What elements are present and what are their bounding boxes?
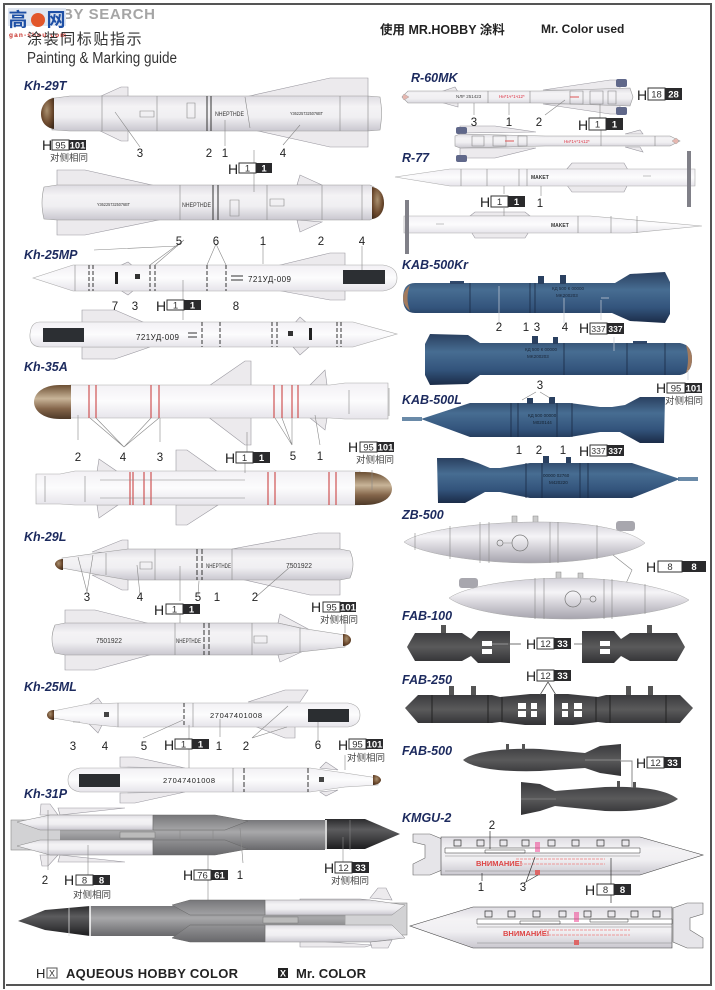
- panel: KAB-500Kr: KAB-500Kr: [402, 258, 469, 272]
- callouts: [516, 380, 624, 459]
- callouts: 2: [42, 875, 48, 887]
- callouts: [646, 559, 706, 575]
- callouts: 1: [214, 592, 220, 604]
- callouts: [84, 592, 358, 626]
- bomb top view: КД 500 К 00000: [552, 286, 585, 291]
- panel: FAB-250: FAB-250: [402, 673, 452, 687]
- callouts: 5: [195, 592, 201, 604]
- missile top view: [11, 804, 400, 920]
- callouts: 1: [612, 120, 618, 130]
- callouts: 4: [280, 148, 287, 160]
- callouts: 337: [591, 324, 606, 334]
- callouts: 1: [242, 453, 247, 464]
- missile top view: [55, 533, 353, 601]
- callouts: H: [228, 161, 238, 177]
- bomb left view: [407, 625, 520, 663]
- callouts: H: [348, 439, 358, 455]
- callouts: 8: [603, 885, 608, 896]
- callouts: 2: [489, 820, 495, 832]
- bomb bottom view: КД 500 К 00000: [525, 347, 558, 352]
- bomb top view: M020144: [533, 420, 552, 425]
- bomb top view: КД 500 00000: [528, 413, 557, 418]
- callouts: 1: [189, 604, 195, 616]
- callouts: 95: [55, 140, 66, 152]
- panel: Kh-25MP: [24, 236, 397, 359]
- callouts: 1: [222, 148, 228, 160]
- colour code: 12: [650, 758, 661, 769]
- pod bottom view: [410, 903, 703, 948]
- callouts: 对侧相同: [73, 889, 111, 901]
- bomb top view: [402, 392, 665, 443]
- watermark: site logo: 网: [46, 10, 66, 31]
- callouts: H: [585, 882, 595, 898]
- pod top view: [413, 831, 703, 903]
- callouts: 3: [471, 117, 477, 129]
- callouts: 95: [363, 442, 374, 454]
- watermark: hobby search: HOBBY SEARCH: [27, 6, 155, 23]
- callouts: 3: [137, 148, 143, 160]
- callouts: H: [646, 559, 656, 575]
- callouts: 1: [478, 882, 484, 894]
- title chinese: 涂装同标贴指示: [27, 31, 143, 48]
- callouts: 337: [608, 446, 623, 456]
- tank top view: [404, 516, 645, 597]
- missile bottom view: Y362257325076BT: [97, 202, 130, 207]
- callouts: 对侧相同: [665, 395, 703, 407]
- bomb bottom view: MK200203: [527, 354, 549, 359]
- colour code: [636, 755, 681, 771]
- callouts: 95: [671, 384, 681, 394]
- panel: Kh-31P: [11, 787, 407, 948]
- callouts: 对侧相同: [320, 614, 358, 626]
- callouts: 4: [137, 592, 144, 604]
- callouts: 1: [172, 604, 177, 616]
- callouts: 7: [112, 301, 118, 313]
- callouts: 3: [84, 592, 90, 604]
- bomb bottom view: [425, 334, 692, 385]
- missile bottom view: NHEPTHDE: [182, 202, 212, 209]
- callouts: 4: [562, 322, 569, 334]
- missile top view: Y362257325076BT: [290, 111, 323, 116]
- callouts: 1: [181, 740, 186, 750]
- missile bottom view: MAKET: [551, 223, 569, 229]
- missile top view: 721УД-009: [248, 275, 292, 284]
- missile top view: Ни*1ч*1ч12*: [499, 94, 525, 99]
- callouts: 2: [206, 148, 212, 160]
- callouts: 1: [260, 236, 266, 248]
- bomb bottom view: [521, 781, 678, 815]
- callouts: 1: [237, 870, 243, 882]
- missile bottom view: [404, 200, 702, 254]
- callouts: 337: [591, 446, 606, 456]
- panel: R-77: R-77: [402, 151, 430, 165]
- panel: Kh-25ML: [24, 680, 385, 803]
- pod bottom view: ВНИМАНИЕ!: [503, 929, 549, 938]
- callouts: [471, 87, 682, 133]
- missile bottom view: Ни*1ч*1ч12*: [564, 139, 590, 144]
- callouts: 1: [506, 117, 512, 129]
- callouts: 对侧相同: [331, 875, 369, 887]
- callouts: 2: [536, 117, 542, 129]
- panel: Kh-29L: Kh-29L: [24, 530, 66, 544]
- callouts: 101: [378, 442, 394, 454]
- callouts: 对侧相同: [356, 454, 394, 466]
- panel: ZB-500: ZB-500: [401, 508, 444, 522]
- callouts: 3: [537, 380, 543, 392]
- bomb right view: [582, 625, 685, 663]
- panel: KMGU-2: KMGU-2: [402, 811, 451, 825]
- missile top view: 7501922: [286, 563, 312, 570]
- callouts: 2: [536, 445, 542, 457]
- callouts: 1: [514, 197, 520, 208]
- callouts: 76: [197, 870, 208, 882]
- missile bottom view: [36, 450, 392, 525]
- callouts: 2: [252, 592, 258, 604]
- callouts: H: [578, 117, 588, 133]
- callouts: 4: [102, 741, 109, 753]
- callouts: H: [42, 137, 52, 153]
- callouts: 1: [317, 451, 323, 463]
- callouts: 1: [173, 300, 178, 312]
- missile bottom view: [68, 725, 381, 803]
- callouts: [42, 860, 369, 901]
- missile top view: 27047401008: [210, 711, 262, 720]
- callouts: 3: [520, 882, 526, 894]
- callouts: 3: [534, 322, 540, 334]
- callouts: 5: [290, 451, 296, 463]
- callouts: 6: [213, 236, 219, 248]
- missile top view: [47, 690, 360, 740]
- panel: KAB-500L: KAB-500L: [402, 393, 462, 407]
- callouts: [496, 320, 703, 407]
- callouts: [42, 137, 287, 177]
- callouts: H: [480, 194, 490, 210]
- callouts: 1: [190, 300, 196, 312]
- callouts: H: [156, 298, 166, 314]
- missile bottom view: [455, 125, 680, 162]
- legend: aqueous hobby color: AQUEOUS HOBBY COLOR: [66, 966, 239, 981]
- callouts: 5: [176, 236, 182, 248]
- panel: KAB-500Kr: [402, 258, 703, 407]
- callouts: [480, 194, 543, 210]
- colour code: H: [526, 636, 536, 652]
- callouts: [70, 737, 385, 764]
- panel: Kh-25MP: Kh-25MP: [24, 248, 78, 262]
- callouts: 8: [82, 876, 87, 886]
- missile top view: MAKET: [531, 175, 549, 181]
- callouts: 1: [537, 198, 543, 210]
- legend: mr. color: Mr. COLOR: [296, 966, 367, 981]
- callouts: 8: [233, 301, 239, 313]
- colour code: 33: [557, 671, 568, 682]
- callouts: 1: [516, 445, 522, 457]
- legend: mr. color: X: [280, 968, 286, 978]
- panel: Kh-29T: Kh-29T: [24, 79, 68, 93]
- callouts: H: [183, 867, 193, 883]
- callouts: H: [579, 320, 589, 336]
- legend: aqueous hobby color: X: [49, 968, 55, 978]
- callouts: 3: [70, 741, 76, 753]
- callouts: 101: [686, 384, 702, 394]
- panel: Kh-31P: Kh-31P: [24, 787, 68, 801]
- callouts: 2: [75, 452, 81, 464]
- callouts: 对侧相同: [50, 152, 88, 164]
- missile bottom view: [18, 888, 407, 948]
- bomb top view: [463, 744, 632, 787]
- panel: FAB-500: FAB-500: [402, 744, 452, 758]
- missile bottom view: 27047401008: [163, 776, 215, 785]
- bomb top view: [403, 272, 670, 324]
- colour code: H: [526, 668, 536, 684]
- missile top view: [33, 240, 397, 300]
- callouts: 3: [157, 452, 163, 464]
- panel: Kh-29T: [24, 78, 384, 235]
- panel: R-60MK: [402, 71, 682, 162]
- watermark: site logo: 高: [8, 8, 28, 31]
- callouts: 101: [70, 140, 86, 152]
- missile top view: NHEPTHDE: [215, 111, 245, 118]
- paint brand note: 使用 MR.HOBBY 涂料: [380, 22, 505, 37]
- callouts: 337: [608, 324, 623, 334]
- callouts: H: [311, 599, 321, 615]
- callouts: 3: [132, 301, 138, 313]
- pod top view: ВНИМАНИЕ!: [476, 859, 522, 868]
- callouts: 1: [523, 322, 529, 334]
- colour note: Mr. Color used: [541, 22, 624, 36]
- panel: KMGU-2: [402, 811, 703, 948]
- panel: KAB-500L: [402, 380, 698, 503]
- callouts: 1: [497, 197, 502, 208]
- callouts: 12: [338, 863, 349, 874]
- panel: Kh-35A: Kh-35A: [24, 360, 68, 374]
- callouts: 1: [259, 453, 265, 464]
- callouts: 4: [359, 236, 366, 248]
- callouts: 18: [651, 90, 662, 100]
- callouts: H: [338, 737, 348, 753]
- callouts: [75, 439, 394, 466]
- callouts: H: [637, 87, 647, 103]
- missile bottom view: [52, 605, 351, 670]
- callouts: 8: [99, 876, 104, 886]
- bomb bottom view: M420220: [549, 480, 568, 485]
- callouts: H: [154, 602, 164, 618]
- missile top view: [395, 151, 695, 207]
- callouts: 1: [560, 445, 566, 457]
- callouts: [112, 236, 366, 314]
- watermark: site logo: [8, 8, 66, 39]
- panel: R-60MK: R-60MK: [411, 71, 459, 85]
- panel: FAB-100: [402, 609, 685, 663]
- callouts: 6: [315, 740, 321, 752]
- callouts: H: [579, 443, 589, 459]
- callouts: 101: [340, 602, 357, 614]
- colour code: 12: [540, 639, 551, 650]
- callouts: 33: [355, 863, 366, 874]
- missile bottom view: [42, 150, 384, 235]
- colour code: [508, 636, 600, 652]
- bomb right view: [554, 686, 693, 725]
- callouts: 对侧相同: [347, 752, 385, 764]
- missile bottom view: NHEPTHDE: [176, 639, 201, 645]
- bomb bottom view: 00000 02760: [543, 473, 570, 478]
- missile bottom view: 7501922: [96, 638, 122, 645]
- callouts: H: [164, 737, 174, 753]
- watermark: site logo: gan-shou.com: [9, 32, 66, 39]
- callouts: [478, 820, 631, 898]
- colour code: 12: [540, 671, 551, 682]
- panel: R-77: [395, 151, 702, 254]
- missile top view: NЛF 251423: [456, 94, 482, 99]
- callouts: 4: [120, 452, 127, 464]
- callouts: 1: [261, 164, 267, 174]
- callouts: 1: [245, 164, 250, 174]
- callouts: 95: [352, 740, 363, 750]
- panel: Kh-29L: [24, 530, 358, 670]
- missile top view: NHEPTHDE: [206, 564, 231, 570]
- colour code: 33: [667, 758, 678, 769]
- panel: Kh-35A: [24, 360, 394, 525]
- callouts: H: [324, 860, 334, 876]
- callouts: 61: [214, 870, 225, 882]
- missile bottom view: 721УД-009: [136, 333, 180, 342]
- callouts: 95: [326, 602, 337, 614]
- callouts: 1: [216, 741, 222, 753]
- missile top view: [402, 79, 633, 124]
- bomb top view: MK200203: [556, 293, 578, 298]
- missile top view: [41, 78, 382, 147]
- title english: Painting & Marking guide: [27, 50, 177, 67]
- callouts: 2: [318, 236, 324, 248]
- missile top view: [34, 361, 389, 452]
- tank bottom view: [449, 572, 689, 619]
- bomb bottom view: [437, 456, 698, 503]
- callouts: 8: [667, 562, 673, 573]
- colour code: H: [636, 755, 646, 771]
- callouts: 101: [367, 740, 383, 750]
- legend: aqueous hobby color: H: [36, 966, 45, 981]
- callouts: H: [225, 450, 235, 466]
- panel: FAB-500: [402, 744, 681, 815]
- panel: FAB-100: FAB-100: [402, 609, 452, 623]
- callouts: 5: [141, 741, 147, 753]
- callouts: 1: [198, 740, 204, 750]
- callouts: 8: [620, 885, 625, 896]
- callouts: 2: [496, 322, 502, 334]
- callouts: 8: [691, 562, 697, 573]
- callouts: 1: [595, 120, 600, 130]
- colour code: [526, 668, 571, 695]
- callouts: H: [656, 380, 666, 396]
- callouts: H: [64, 872, 74, 888]
- callouts: 28: [668, 90, 679, 100]
- callouts: 2: [243, 741, 249, 753]
- missile bottom view: [30, 280, 397, 359]
- panel: FAB-250: [402, 668, 693, 725]
- bomb left view: [405, 686, 546, 725]
- panel: ZB-500: [401, 508, 706, 619]
- colour code: 33: [557, 639, 568, 650]
- panel: Kh-25ML: Kh-25ML: [24, 680, 77, 694]
